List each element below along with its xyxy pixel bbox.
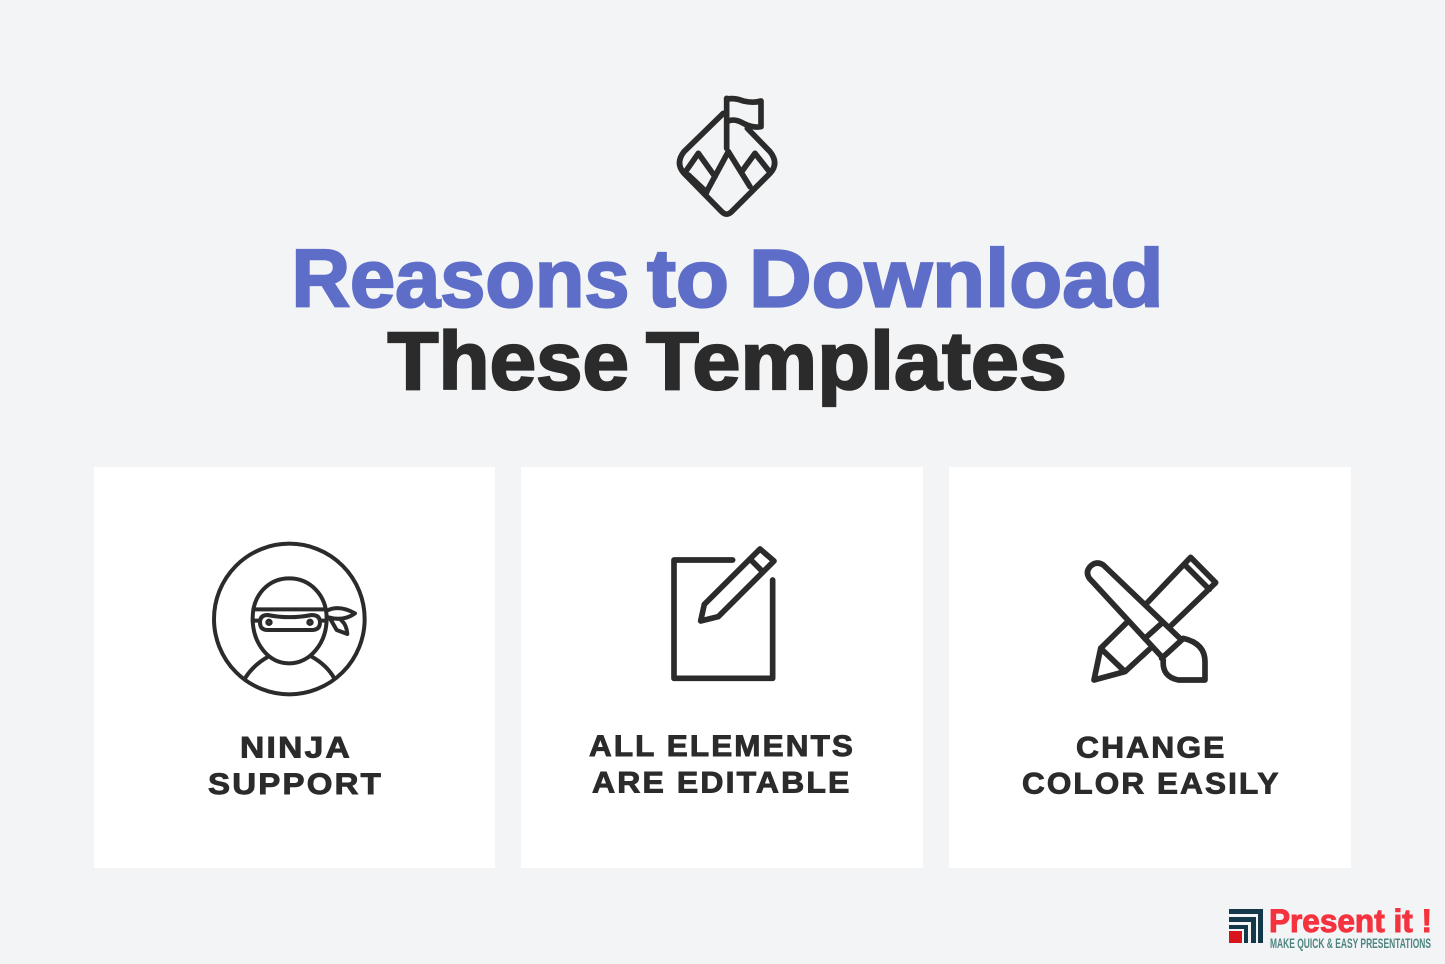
title: Templates — [646, 316, 1067, 407]
icon: logo mark — [1229, 909, 1263, 943]
icon: mountain with flag — [679, 98, 775, 214]
title: These — [388, 316, 629, 407]
label: change color easily: CHANGE — [1076, 732, 1226, 764]
icon: ninja — [214, 544, 365, 694]
logo: present it — [1229, 903, 1432, 951]
panel: change color easily: COLOR EASILY — [1022, 768, 1280, 800]
panel: all elements are editable — [521, 467, 923, 868]
label: all elements are editable: ALL ELEMENTS — [589, 730, 855, 763]
label: ninja support: NINJA — [240, 732, 352, 764]
panel: all elements are editable: ARE EDITABLE — [592, 766, 852, 800]
panel: ninja support: SUPPORT — [208, 768, 383, 801]
logo: present it: Present it ! — [1269, 903, 1432, 939]
icon: pencil on page — [674, 549, 774, 678]
panel: change color easily — [949, 467, 1351, 868]
panel: ninja support — [94, 467, 495, 868]
title: to — [647, 234, 729, 324]
title: Reasons — [292, 234, 630, 324]
title: Download — [749, 234, 1164, 324]
icon: crossed pencil and brush — [1087, 557, 1216, 680]
title — [292, 234, 1164, 407]
